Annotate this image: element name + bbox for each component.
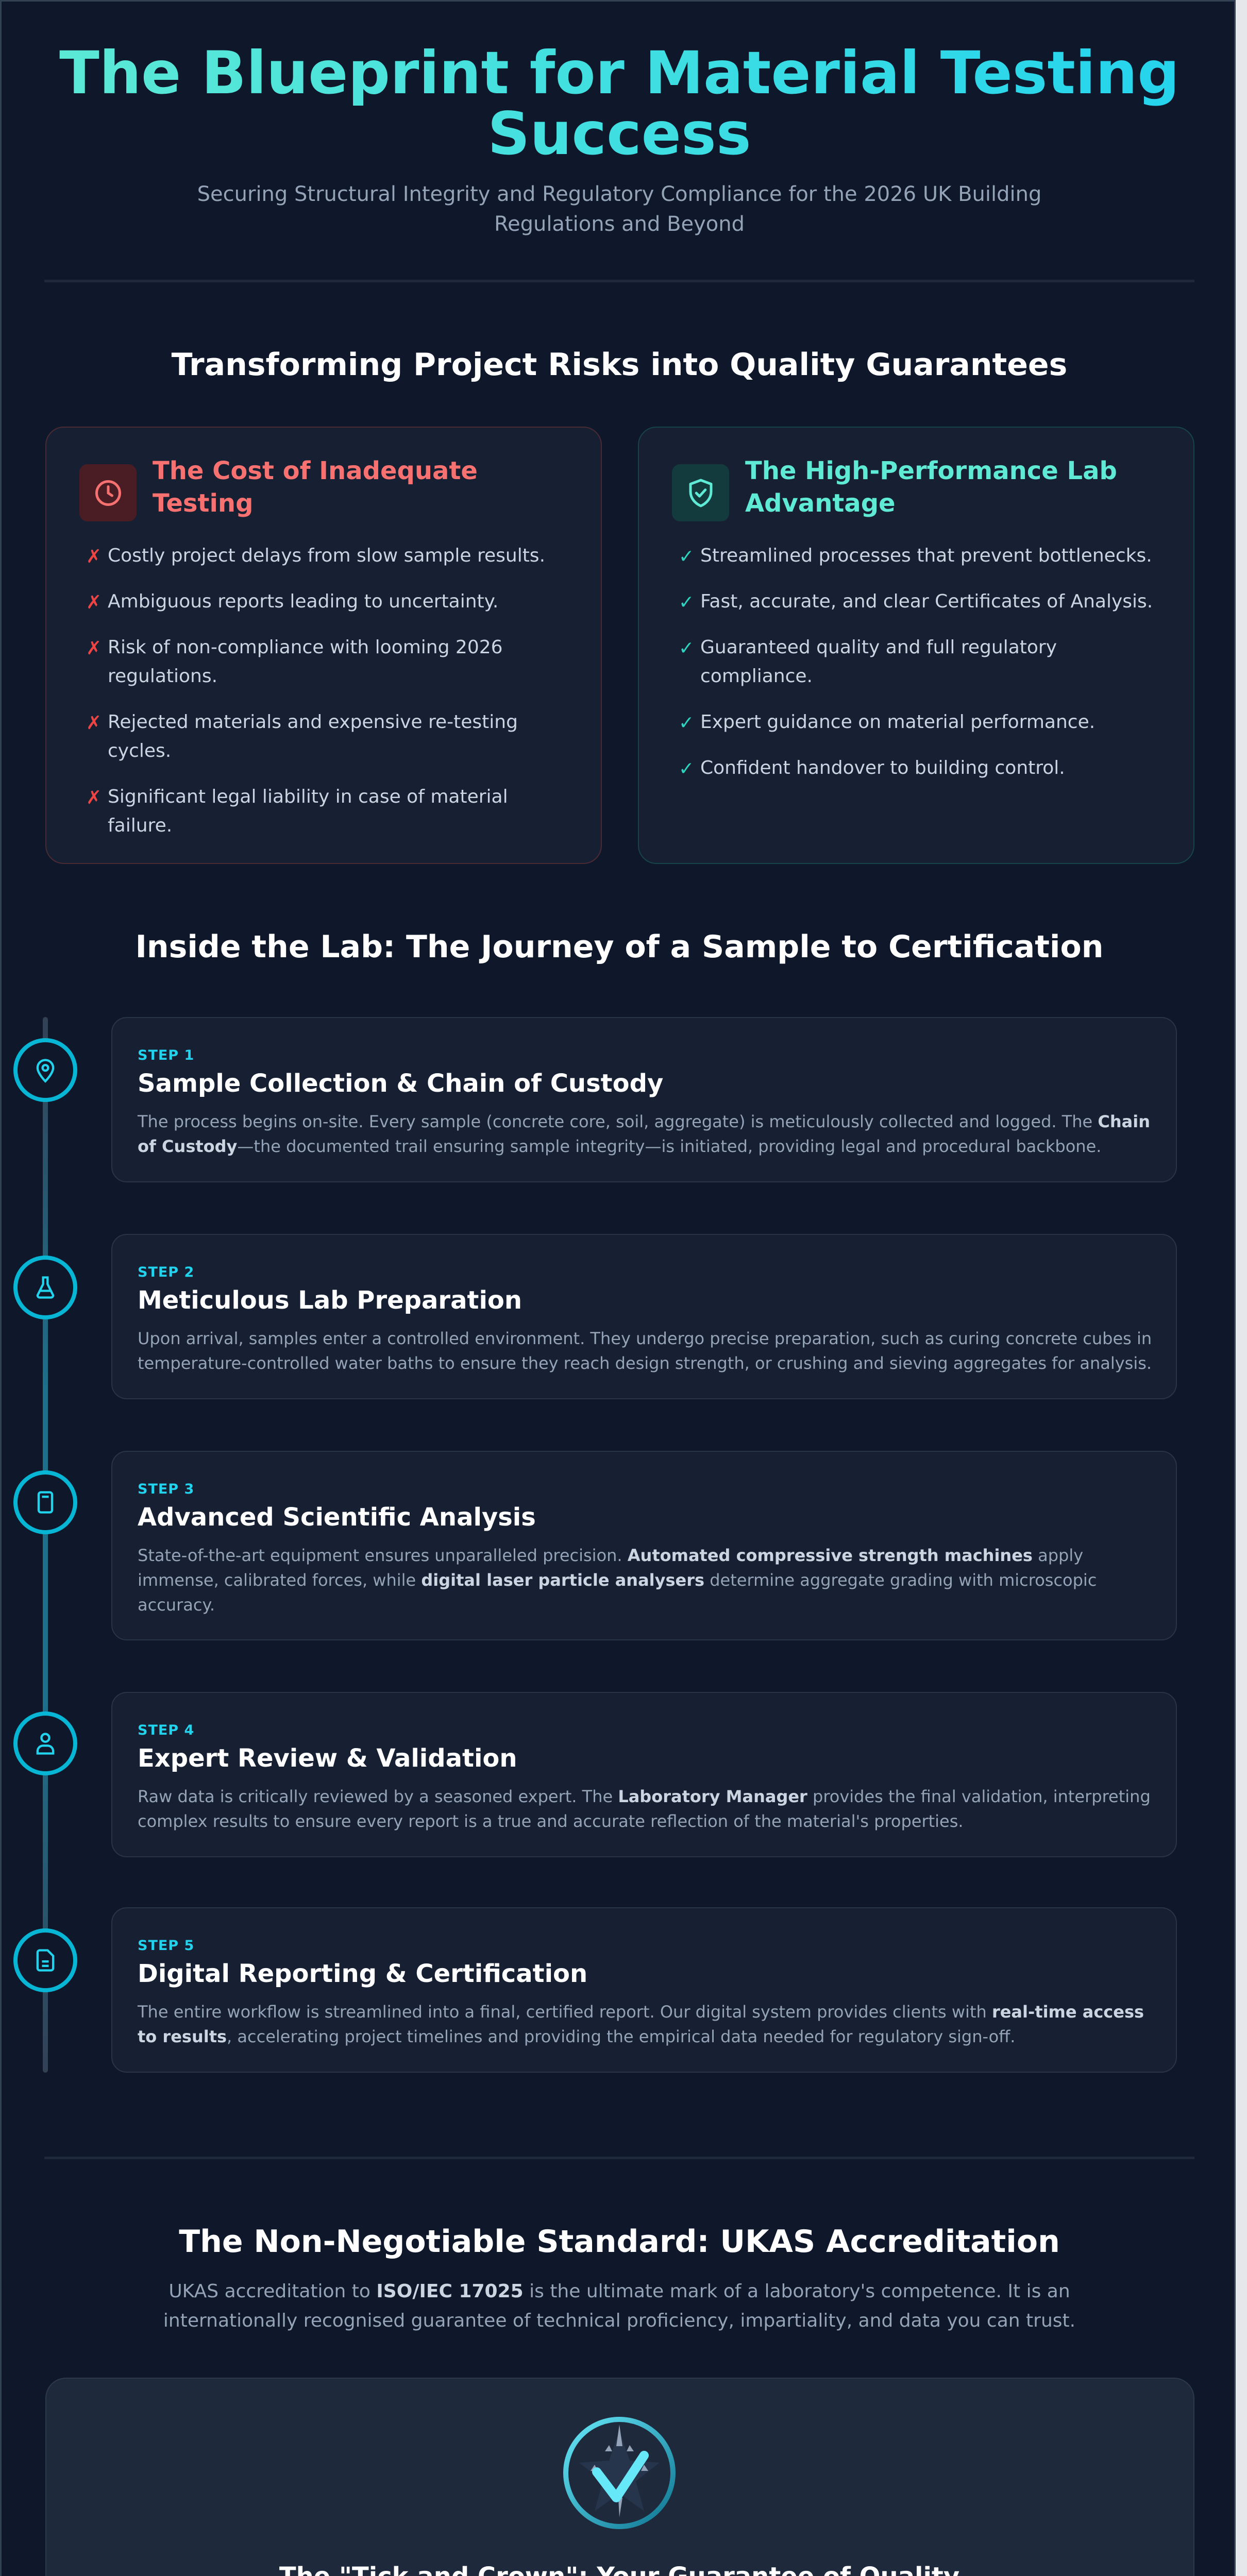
heading: cost <box>153 456 478 518</box>
list: risks: Risk of non-compliance with looming 2026 regulations. <box>108 637 503 687</box>
timeline line <box>43 1017 48 2073</box>
icon: shield check <box>672 464 729 521</box>
icon: document <box>13 1928 77 1992</box>
step 5 <box>111 1907 1177 2073</box>
title <box>59 39 1179 168</box>
list: risks <box>86 545 545 836</box>
step 4 <box>111 1692 1177 1857</box>
step 2 <box>111 1234 1177 1399</box>
heading: advantage <box>745 456 1117 518</box>
heading: advantage: Advantage <box>745 489 896 518</box>
step 5: The entire workflow is streamlined into a final, certified report. Our digital system provides clients with real-time access to results, accelerating project timelines and providing the empirical data needed for regulatory sign-off. <box>138 2002 1144 2046</box>
list: risks: Ambiguous reports leading to uncertainty. <box>108 591 498 612</box>
heading: cost: Testing <box>153 489 253 518</box>
list: benefits: ✓ <box>679 638 694 659</box>
step 1: Sample Collection & Chain of Custody <box>138 1069 663 1098</box>
heading: UKAS: The Non-Negotiable Standard: UKAS Accreditation <box>179 2224 1060 2260</box>
list: benefits: Confident handover to building control. <box>700 757 1065 778</box>
title: The Blueprint for Material Testing <box>59 39 1179 107</box>
heading: cost: The Cost of Inadequate <box>153 456 478 485</box>
step 1: The process begins on-site. Every sample (concrete core, soil, aggregate) is meticulously collected and logged. The Chain of Custody—the documented trail ensuring sample integrity—is initiated, providing legal and procedural backbone. <box>138 1112 1150 1156</box>
step 2: STEP 2 <box>138 1264 194 1280</box>
icon: map pin <box>13 1038 77 1102</box>
step 4: Expert Review & Validation <box>138 1744 517 1773</box>
step 4: STEP 4 <box>138 1722 194 1738</box>
text: UKAS intro: UKAS accreditation to ISO/IEC 17025 is the ultimate mark of a laboratory's competence. It is an internationally recognised guarantee of technical proficiency, impartiality, and data you can trust. <box>163 2281 1075 2331</box>
list: risks: ✗ <box>86 713 102 734</box>
step 1: STEP 1 <box>138 1047 194 1063</box>
heading: transforming risks: Transforming Project Risks into Quality Guarantees <box>172 347 1067 383</box>
icon: clock <box>79 464 137 521</box>
list: risks: Rejected materials and expensive re-testing cycles. <box>108 711 518 761</box>
step 3 <box>111 1451 1177 1640</box>
step 5: Digital Reporting & Certification <box>138 1959 587 1988</box>
list: benefits: ✓ <box>679 758 694 779</box>
step 2: Upon arrival, samples enter a controlled environment. They undergo precise preparation, such as curing concrete cubes in temperature-controlled water baths to ensure they reach design strength, or crushing and sieving aggregates for analysis. <box>138 1329 1152 1373</box>
list: risks: Costly project delays from slow sample results. <box>108 545 545 566</box>
list: benefits: Fast, accurate, and clear Certificates of Analysis. <box>700 591 1153 612</box>
list: risks: ✗ <box>86 546 102 567</box>
icon: tick and crown badge <box>563 2417 676 2529</box>
step 3: Advanced Scientific Analysis <box>138 1503 536 1532</box>
panel: cost of inadequate testing <box>45 427 602 864</box>
icon: user <box>13 1711 77 1775</box>
panel: tick and crown <box>45 2378 1194 2576</box>
list: risks: Significant legal liability in case of material failure. <box>108 786 508 836</box>
step 1 <box>111 1017 1177 1182</box>
icon: flask <box>13 1256 77 1319</box>
panel: high-performance lab advantage <box>638 427 1194 864</box>
heading: advantage: The High-Performance Lab <box>745 456 1117 485</box>
list: risks: ✗ <box>86 638 102 659</box>
step 2: Meticulous Lab Preparation <box>138 1286 522 1315</box>
step 3: State-of-the-art equipment ensures unparalleled precision. Automated compressive strength machines apply immense, calibrated forces, while digital laser particle analysers determine aggregate grading with microscopic accuracy. <box>138 1546 1097 1615</box>
list: benefits: ✓ <box>679 592 694 613</box>
list: benefits: Streamlined processes that prevent bottlenecks. <box>700 545 1152 566</box>
list: risks: ✗ <box>86 787 102 808</box>
title: Success <box>487 99 751 168</box>
list: benefits: Expert guidance on material performance. <box>700 711 1095 733</box>
list: benefits <box>679 545 1153 779</box>
list: benefits: ✓ <box>679 546 694 567</box>
step 5: STEP 5 <box>138 1938 194 1954</box>
step 3: STEP 3 <box>138 1481 194 1497</box>
list: benefits: Guaranteed quality and full regulatory compliance. <box>700 637 1057 687</box>
subtitle: Securing Structural Integrity and Regulatory Compliance for the 2026 UK Building Regulations and Beyond <box>197 182 1041 236</box>
step 4: Raw data is critically reviewed by a seasoned expert. The Laboratory Manager provides the final validation, interpreting complex results to ensure every report is a true and accurate reflection of the material's properties. <box>138 1787 1151 1831</box>
heading: inside the lab: Inside the Lab: The Journey of a Sample to Certification <box>136 929 1103 965</box>
list: benefits: ✓ <box>679 713 694 734</box>
list: risks: ✗ <box>86 592 102 613</box>
icon: calculator <box>13 1470 77 1534</box>
